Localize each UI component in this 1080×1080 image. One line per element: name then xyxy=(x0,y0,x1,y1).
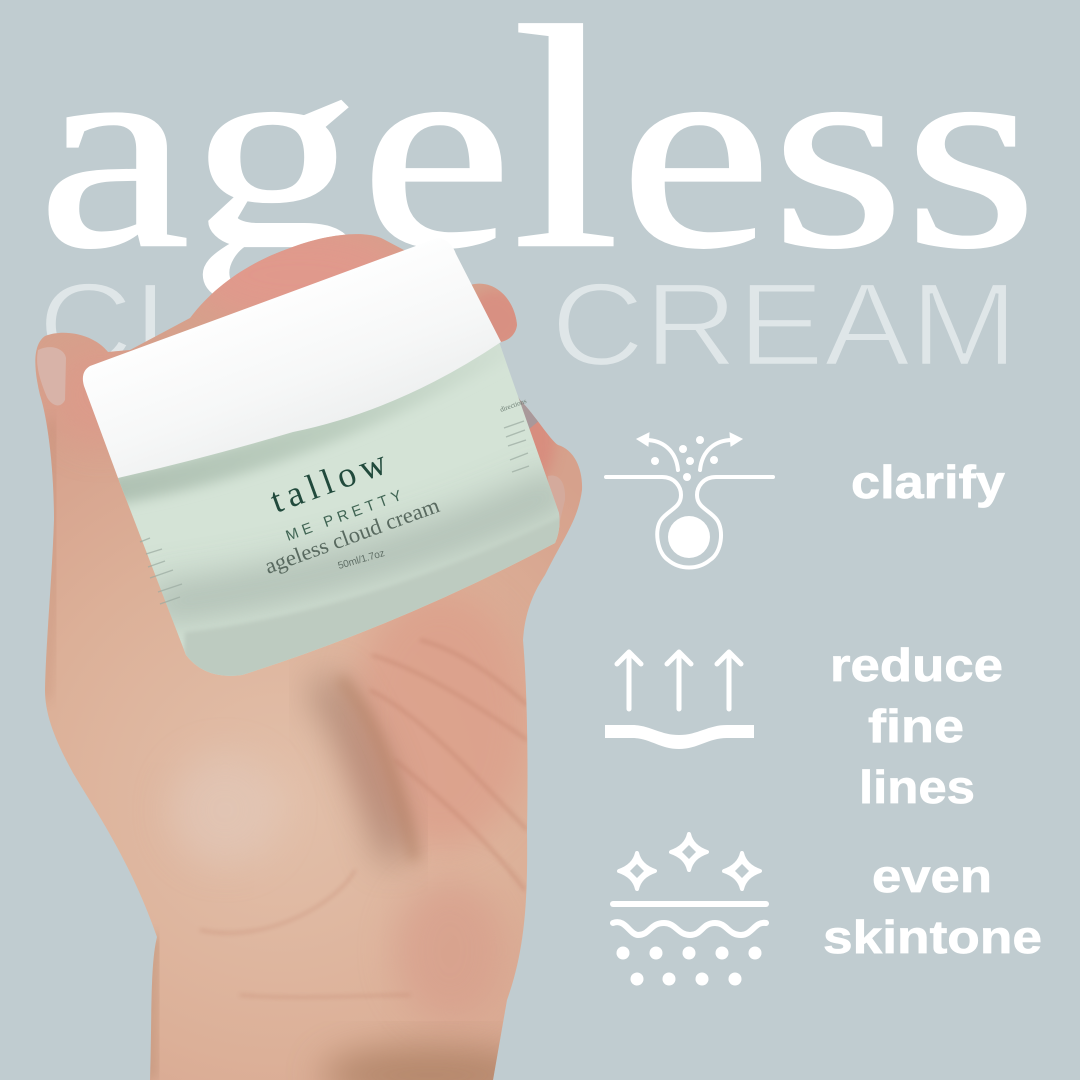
subtitle: CLOUD CREAM: CLOUD xyxy=(38,259,500,391)
subtitle: CLOUD CREAM: CREAM xyxy=(551,259,1018,391)
icon: pore clearing xyxy=(606,433,773,568)
label: even skintone: even xyxy=(872,850,992,902)
thumbnail xyxy=(37,347,66,405)
label: even skintone xyxy=(823,850,1042,963)
brand subtitle: ME PRETTY xyxy=(284,487,404,545)
side label directions: directions xyxy=(499,397,528,414)
jar lid xyxy=(83,239,501,478)
palm creases xyxy=(200,640,527,997)
benefit row: clarify xyxy=(606,433,1005,568)
benefit row: reduce fine lines xyxy=(605,639,1003,813)
hand silhouette xyxy=(20,220,600,1080)
label: reduce fine lines xyxy=(830,639,1003,813)
benefit row: even skintone xyxy=(613,834,1042,986)
subtitle: CLOUD CREAM xyxy=(38,259,1018,391)
side label fine print xyxy=(140,421,529,604)
product name: ageless cloud cream xyxy=(261,492,443,579)
label: reduce fine lines: lines xyxy=(859,761,975,813)
hand holding jar xyxy=(20,220,600,1080)
label: reduce fine lines: fine xyxy=(868,700,964,752)
icon: lifting arrows xyxy=(605,652,754,749)
finger nail xyxy=(548,476,565,525)
label: reduce fine lines: reduce xyxy=(830,639,1003,691)
volume: 50ml/1.7oz xyxy=(337,548,386,572)
brand name: tallow xyxy=(265,442,391,521)
jar body xyxy=(118,343,560,676)
label: clarify: clarify xyxy=(851,456,1005,508)
icon: sparkling skin xyxy=(613,834,766,986)
jar label text xyxy=(261,397,528,579)
label: even skintone: skintone xyxy=(823,911,1042,963)
